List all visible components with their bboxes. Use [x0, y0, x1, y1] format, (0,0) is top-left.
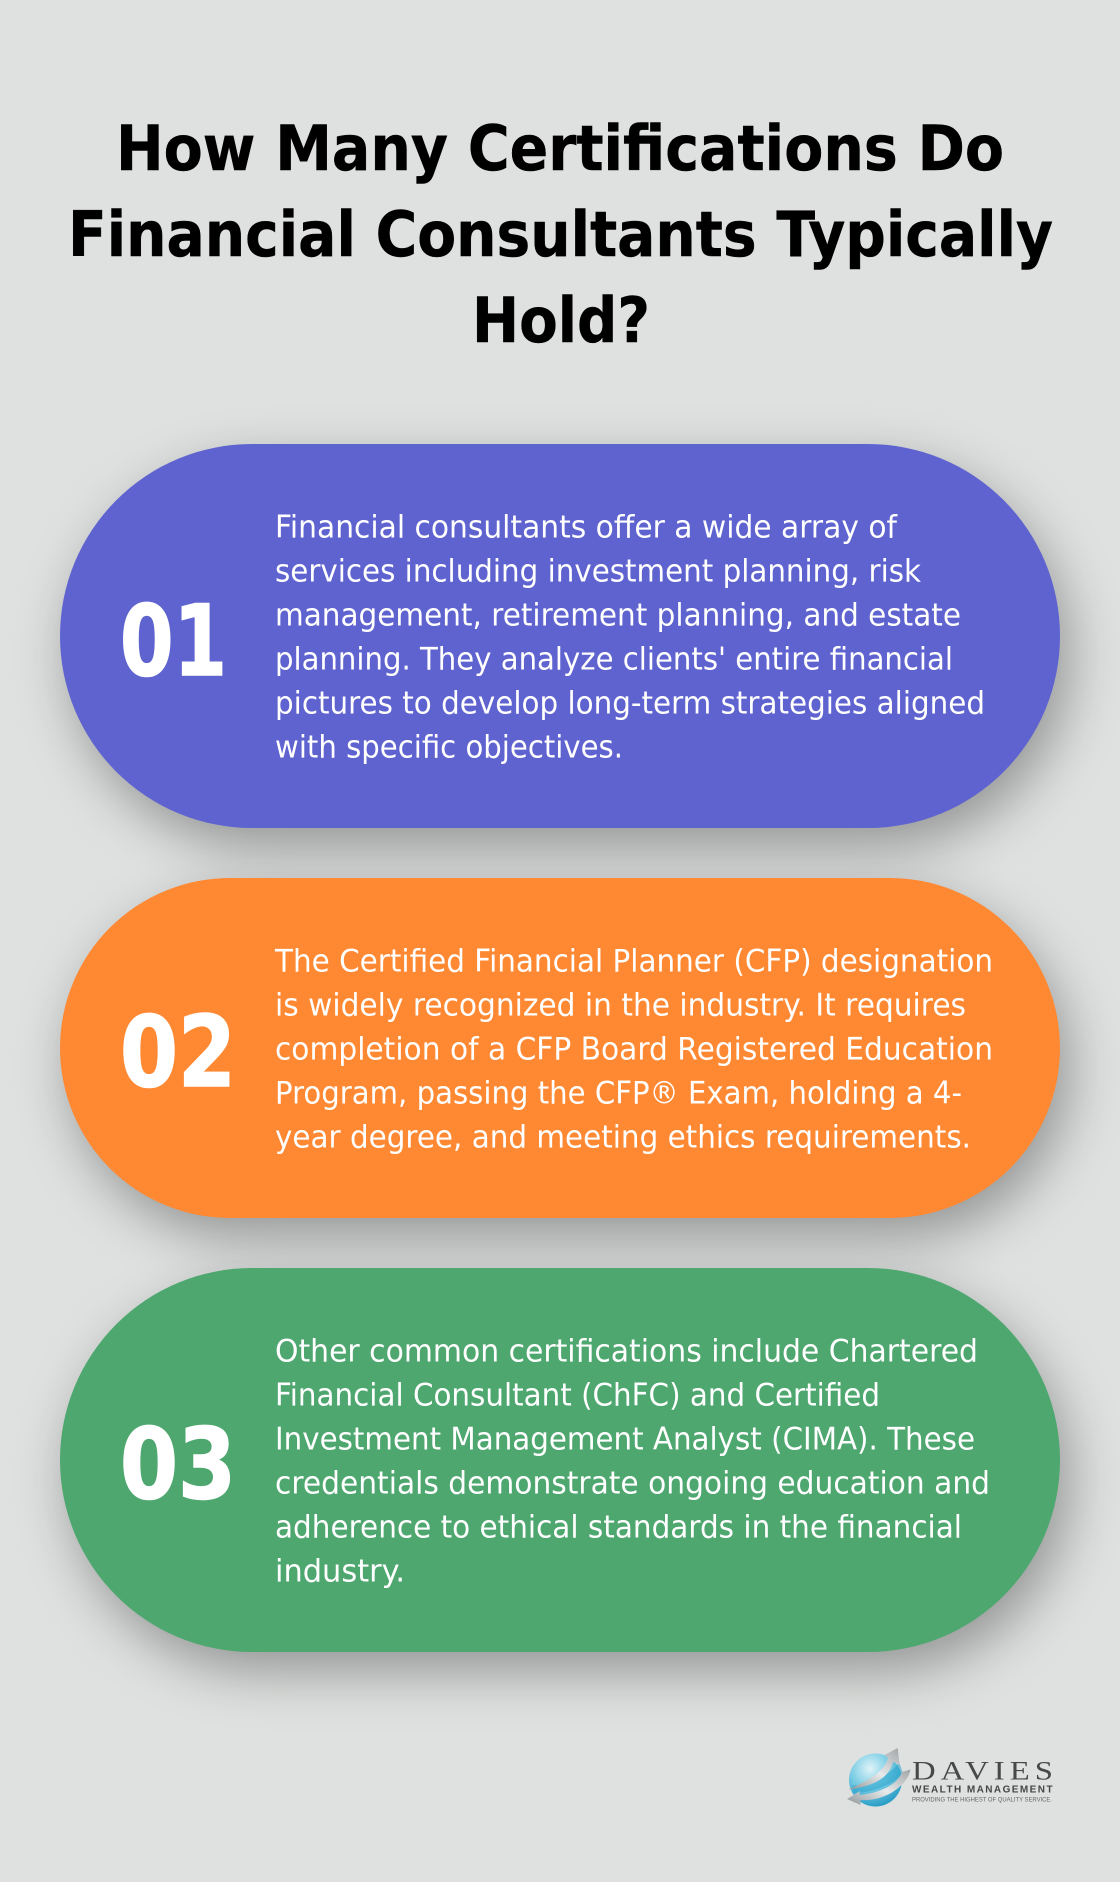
panel: step 03 — [60, 1268, 1060, 1652]
text block 03: industry. — [275, 1554, 405, 1590]
text block 03: Other common certifications include Chartered — [275, 1334, 978, 1370]
title — [68, 112, 1053, 357]
text block 01 — [275, 510, 985, 766]
pill background 01 — [60, 444, 1060, 828]
logo: Davies Wealth Management — [847, 1748, 1058, 1806]
text block 02 — [274, 944, 993, 1156]
tagline: PROVIDING THE HIGHEST OF QUALITY SERVICE. — [912, 1797, 1052, 1804]
text block 02: Program, passing the CFP® Exam, holding a 4- — [275, 1076, 962, 1112]
number 01: 01 — [120, 585, 227, 699]
text block 03 — [275, 1334, 990, 1590]
text block 01: with specific objectives. — [275, 730, 623, 766]
text block 03: adherence to ethical standards in the financial — [275, 1510, 962, 1546]
panel: step 02 — [60, 878, 1060, 1218]
text block 01: pictures to develop long-term strategies aligned — [275, 686, 985, 722]
icon: globe with arrows — [847, 1748, 910, 1806]
text block 02: year degree, and meeting ethics requirements. — [275, 1120, 971, 1156]
wordmark: WEALTH MANAGEMENT: WEALTH MANAGEMENT — [912, 1784, 1054, 1796]
title: Hold? — [472, 284, 650, 357]
pill background 02 — [60, 878, 1060, 1218]
wordmark: DAVIES: DAVIES — [912, 1756, 1058, 1786]
text block 03: Financial Consultant (ChFC) and Certified — [275, 1378, 880, 1414]
number 02: 02 — [120, 996, 236, 1110]
number 03: 03 — [120, 1408, 236, 1522]
text block 02: is widely recognized in the industry. It requires — [275, 988, 966, 1024]
text block 03: Investment Management Analyst (CIMA). These — [275, 1422, 975, 1458]
title: How Many Certifications Do — [116, 112, 1004, 185]
text block 02: The Certified Financial Planner (CFP) designation — [274, 944, 993, 980]
text block 01: services including investment planning, risk — [275, 554, 922, 590]
text block 01: planning. They analyze clients' entire financial — [275, 642, 953, 678]
text block 02: completion of a CFP Board Registered Education — [275, 1032, 993, 1068]
text block 01: Financial consultants offer a wide array of — [275, 510, 898, 546]
text block 01: management, retirement planning, and estate — [275, 598, 961, 634]
pill background 03 — [60, 1268, 1060, 1652]
text block 03: credentials demonstrate ongoing education and — [275, 1466, 990, 1502]
panel: step 01 — [60, 444, 1060, 828]
